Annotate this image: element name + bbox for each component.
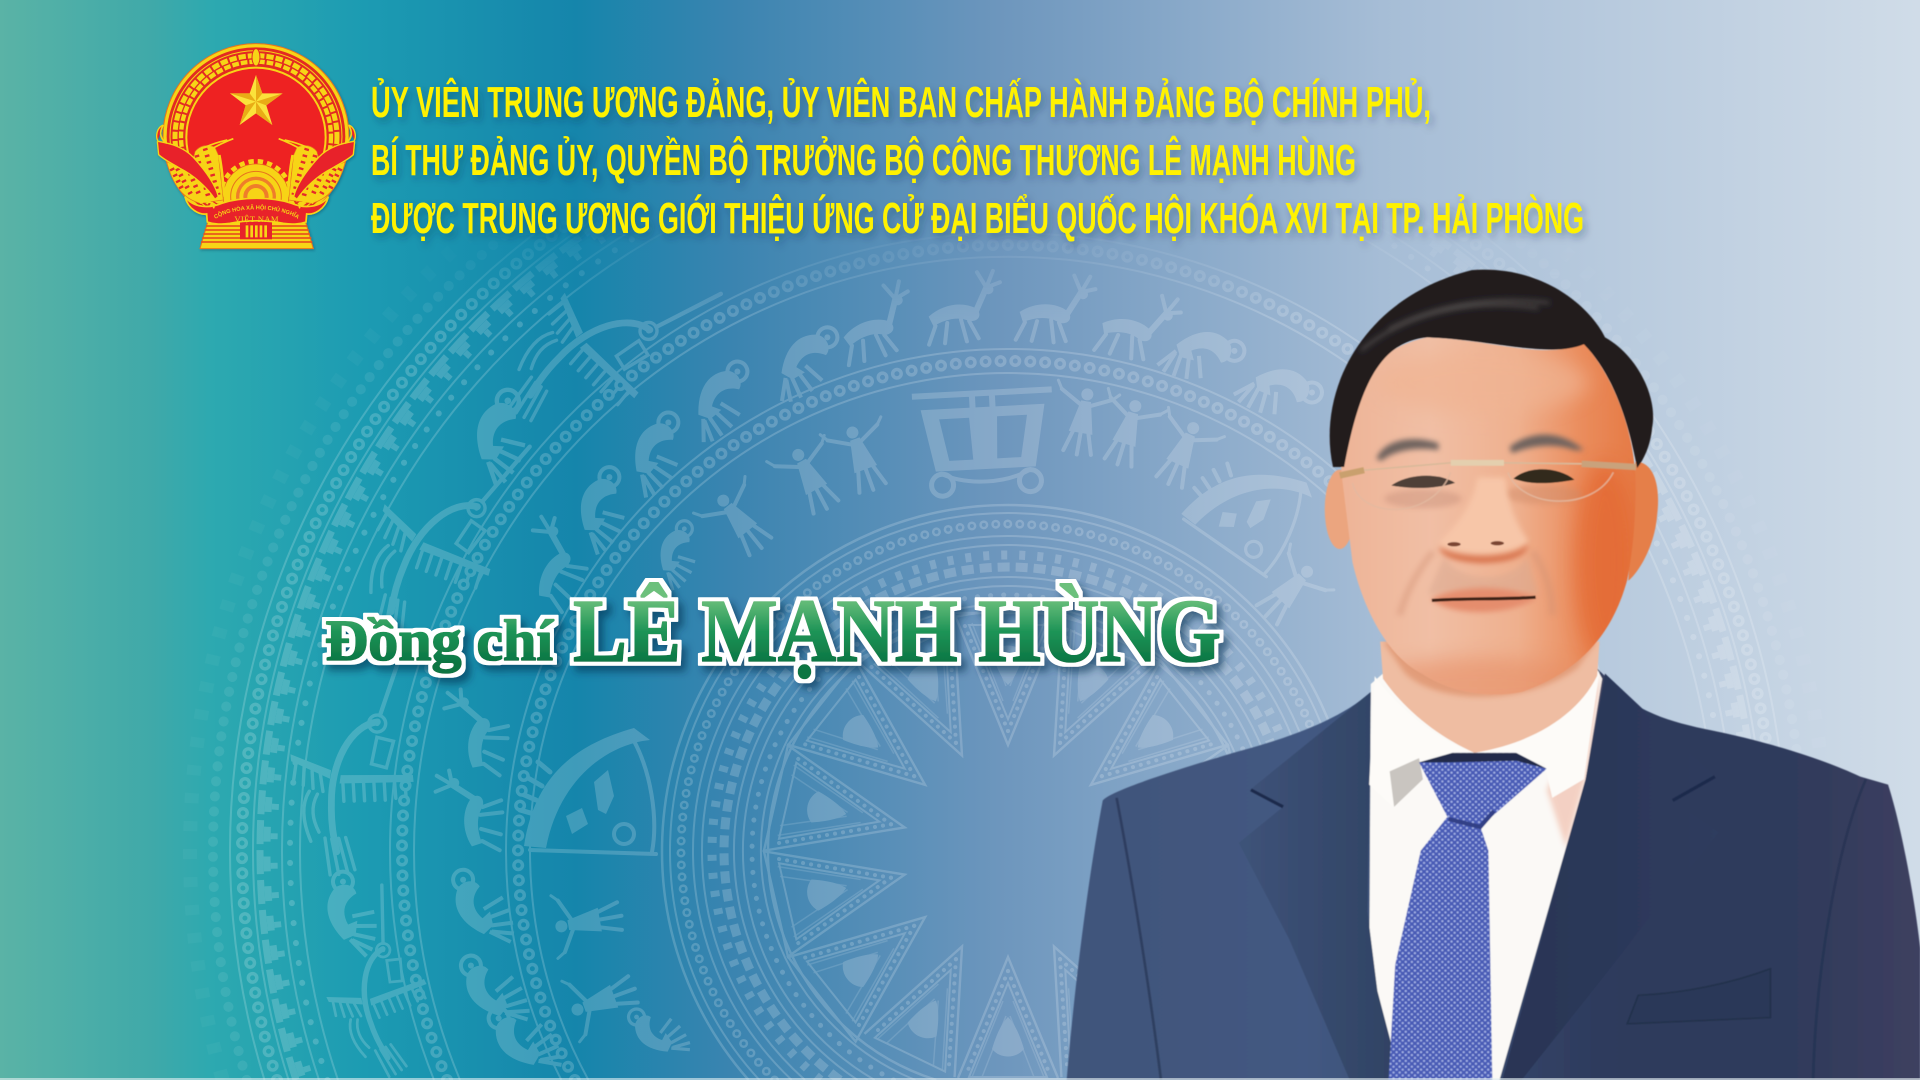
eyebrows xyxy=(1376,435,1584,461)
name: LÊ MẠNH HÙNG: LÊ MẠNH HÙNG xyxy=(573,581,1221,681)
face shading xyxy=(1372,351,1636,710)
ears xyxy=(1325,462,1658,581)
emblem bottom ribbon with text xyxy=(184,196,331,224)
portrait of Lê Mạnh Hùng xyxy=(1067,270,1920,1080)
person name xyxy=(325,581,1221,681)
title: three lines of yellow headline text xyxy=(371,76,1584,243)
background: bronze drum pattern xyxy=(208,237,1780,1080)
national emblem of Vietnam xyxy=(156,43,358,252)
drum rings xyxy=(208,237,1780,1080)
right lapel notch line xyxy=(1673,777,1715,800)
emblem wheat and ribbon left xyxy=(157,125,233,203)
breast pocket xyxy=(1627,969,1770,1024)
neck shadow xyxy=(1383,642,1597,697)
neck xyxy=(1380,642,1599,753)
drum middle band animals xyxy=(432,270,1326,1080)
shirt shadow xyxy=(1547,673,1602,848)
suit jacket xyxy=(1067,668,1920,1080)
eyes xyxy=(1391,469,1574,488)
glasses xyxy=(1340,463,1636,509)
left lapel xyxy=(1239,692,1401,1080)
shirt xyxy=(1369,668,1602,1080)
emblem disc with wheat arch xyxy=(163,44,349,230)
emblem star xyxy=(230,75,283,125)
bottom edge line xyxy=(0,1078,1920,1080)
emblem bottom ribbon with text: CỘNG HÒA XÃ HỘI CHỦ NGHĨA xyxy=(214,204,298,219)
face xyxy=(1341,337,1636,695)
drum centre star rays xyxy=(764,613,1252,1078)
nose xyxy=(1438,478,1528,563)
tie xyxy=(1389,753,1547,1080)
emblem wheat and ribbon right xyxy=(279,125,355,203)
left lapel notch line xyxy=(1251,790,1283,807)
emblem bottom ribbon with text: VIỆT NAM xyxy=(234,214,279,224)
suit sleeve seams xyxy=(1117,779,1866,1080)
emblem gear xyxy=(221,161,291,232)
emblem pedestal xyxy=(200,217,313,249)
drum outer band cranes xyxy=(275,217,739,1080)
prefix: Đồng chí: Đồng chí xyxy=(325,608,554,673)
mouth xyxy=(1431,588,1536,612)
drum inner band figures xyxy=(520,380,1337,1068)
right lapel xyxy=(1502,673,1719,1080)
hair xyxy=(1330,270,1653,468)
shirt collar xyxy=(1369,671,1599,807)
